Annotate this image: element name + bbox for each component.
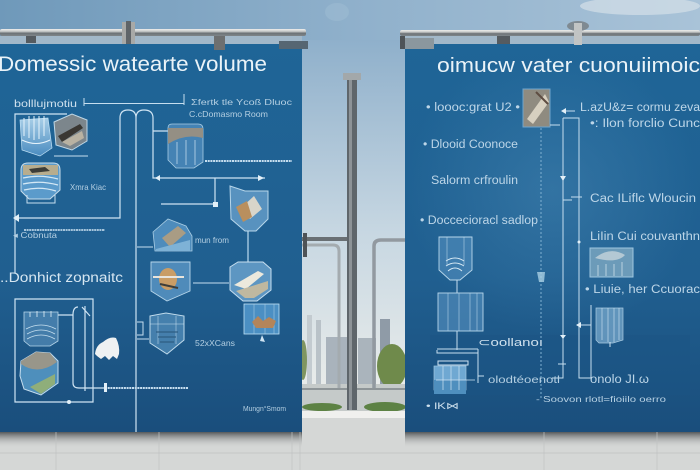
- icon: white blob: [95, 338, 119, 360]
- dimension line: top: [84, 94, 184, 106]
- icon: lower left hexagon: [20, 352, 58, 395]
- dotted line: lower left: [24, 229, 105, 231]
- text: top right notes: Σfertk tle Ycoß Dluoc: [191, 97, 293, 107]
- text list: right labels: Cac ILiflc Wloucin: [590, 193, 696, 205]
- label: coolant: ⊂oollanoı: [478, 337, 543, 349]
- icon: upper right vessel: [230, 186, 268, 262]
- text list: left labels: • Doccecioracl sadlop: [420, 215, 538, 227]
- label: bottom centre: - Soovon rlotl=fioiilo oerro: [536, 394, 666, 404]
- text list: right labels: [580, 102, 700, 386]
- icon: beige pod shield: [151, 262, 190, 301]
- dotted vertical line: [540, 128, 542, 400]
- title: Domessic watearte volume: [0, 53, 267, 76]
- icon: middle hexagon: [153, 219, 192, 251]
- panel: right board: [400, 21, 700, 432]
- label: left arrow: ◂ Cobnuta: [13, 230, 57, 240]
- icon: tiled image box: [244, 304, 279, 342]
- arrow: between pod and vessel: [193, 282, 229, 284]
- icon: tank upper: [168, 124, 203, 168]
- panel: left board: [0, 21, 308, 432]
- frame: upper left loop: [15, 110, 265, 432]
- central pole with pipes: [302, 73, 405, 410]
- frame: lower left: [15, 299, 93, 402]
- icon: aircraft-like shield: [230, 262, 271, 301]
- label: bottom left: • lK⋈: [426, 401, 459, 412]
- frame: lower piping: [58, 306, 105, 391]
- icon: radiator: [596, 308, 623, 347]
- icon: water cross-section: [21, 163, 60, 203]
- text list: left labels: [420, 102, 538, 227]
- text list: left labels: • loooc:grat U2 •: [426, 102, 520, 114]
- label: lower middle: 52xXCans: [195, 338, 235, 348]
- connectors: double vertical pipe: [550, 111, 591, 378]
- icon: lower left tank: [24, 311, 58, 346]
- text: top right notes: [189, 97, 293, 119]
- icon: top tank funnel: [439, 237, 472, 293]
- background: city skyline: [299, 315, 407, 412]
- icon: machinery hexagon: [54, 114, 87, 150]
- label: mid: mun from: [195, 235, 229, 245]
- heading: lower left: ..Donhict zopnaitc: [0, 270, 123, 285]
- title: oimucw vater cuonuiimoic: [437, 55, 700, 77]
- line under hexagon: [54, 155, 88, 157]
- connector: vessel branch: [137, 247, 153, 339]
- label: lower row: olodtéoenotl: [488, 375, 560, 386]
- icon: blue filter: [20, 116, 52, 156]
- text list: right labels: onolo JI.ω: [590, 374, 649, 386]
- text list: left labels: • Dlooid Coonoce: [423, 139, 518, 151]
- arrows on the lower line: [13, 175, 264, 222]
- dotted line: tank output: [205, 160, 292, 162]
- icon: photo tile: [523, 89, 550, 127]
- rail: right mounting pipe: [400, 21, 700, 49]
- text list: right labels: L.azU&z= cormu zeva: [580, 102, 700, 114]
- wall base: [0, 411, 700, 470]
- text list: right labels: LiIin Cui couvanthn: [590, 231, 700, 243]
- icon: small valve: [537, 272, 545, 282]
- text list: right labels: • Liuie, her Ccuorac: [585, 284, 700, 296]
- dotted line: lower output: [105, 387, 188, 389]
- connector: to pump: [437, 331, 484, 383]
- rail: left mounting pipe: [0, 21, 308, 50]
- icon: water tile: [590, 248, 633, 277]
- label: small text: Xmra Kiac: [70, 182, 107, 192]
- label: footer: Mungn°Smom: [243, 404, 286, 413]
- text: top right notes: C.cDomasmo Room: [189, 109, 268, 119]
- label: top left: bolllujmotiu: [14, 98, 77, 110]
- text list: right labels: •: Ilon forclio Cunc: [590, 118, 700, 130]
- text list: left labels: Salorm crfroulin: [431, 175, 518, 187]
- icon: pump unit: [434, 361, 475, 394]
- icon: square tank: [438, 293, 483, 331]
- icon: shield vessel lower: [150, 313, 184, 354]
- connector arrows: [560, 108, 581, 339]
